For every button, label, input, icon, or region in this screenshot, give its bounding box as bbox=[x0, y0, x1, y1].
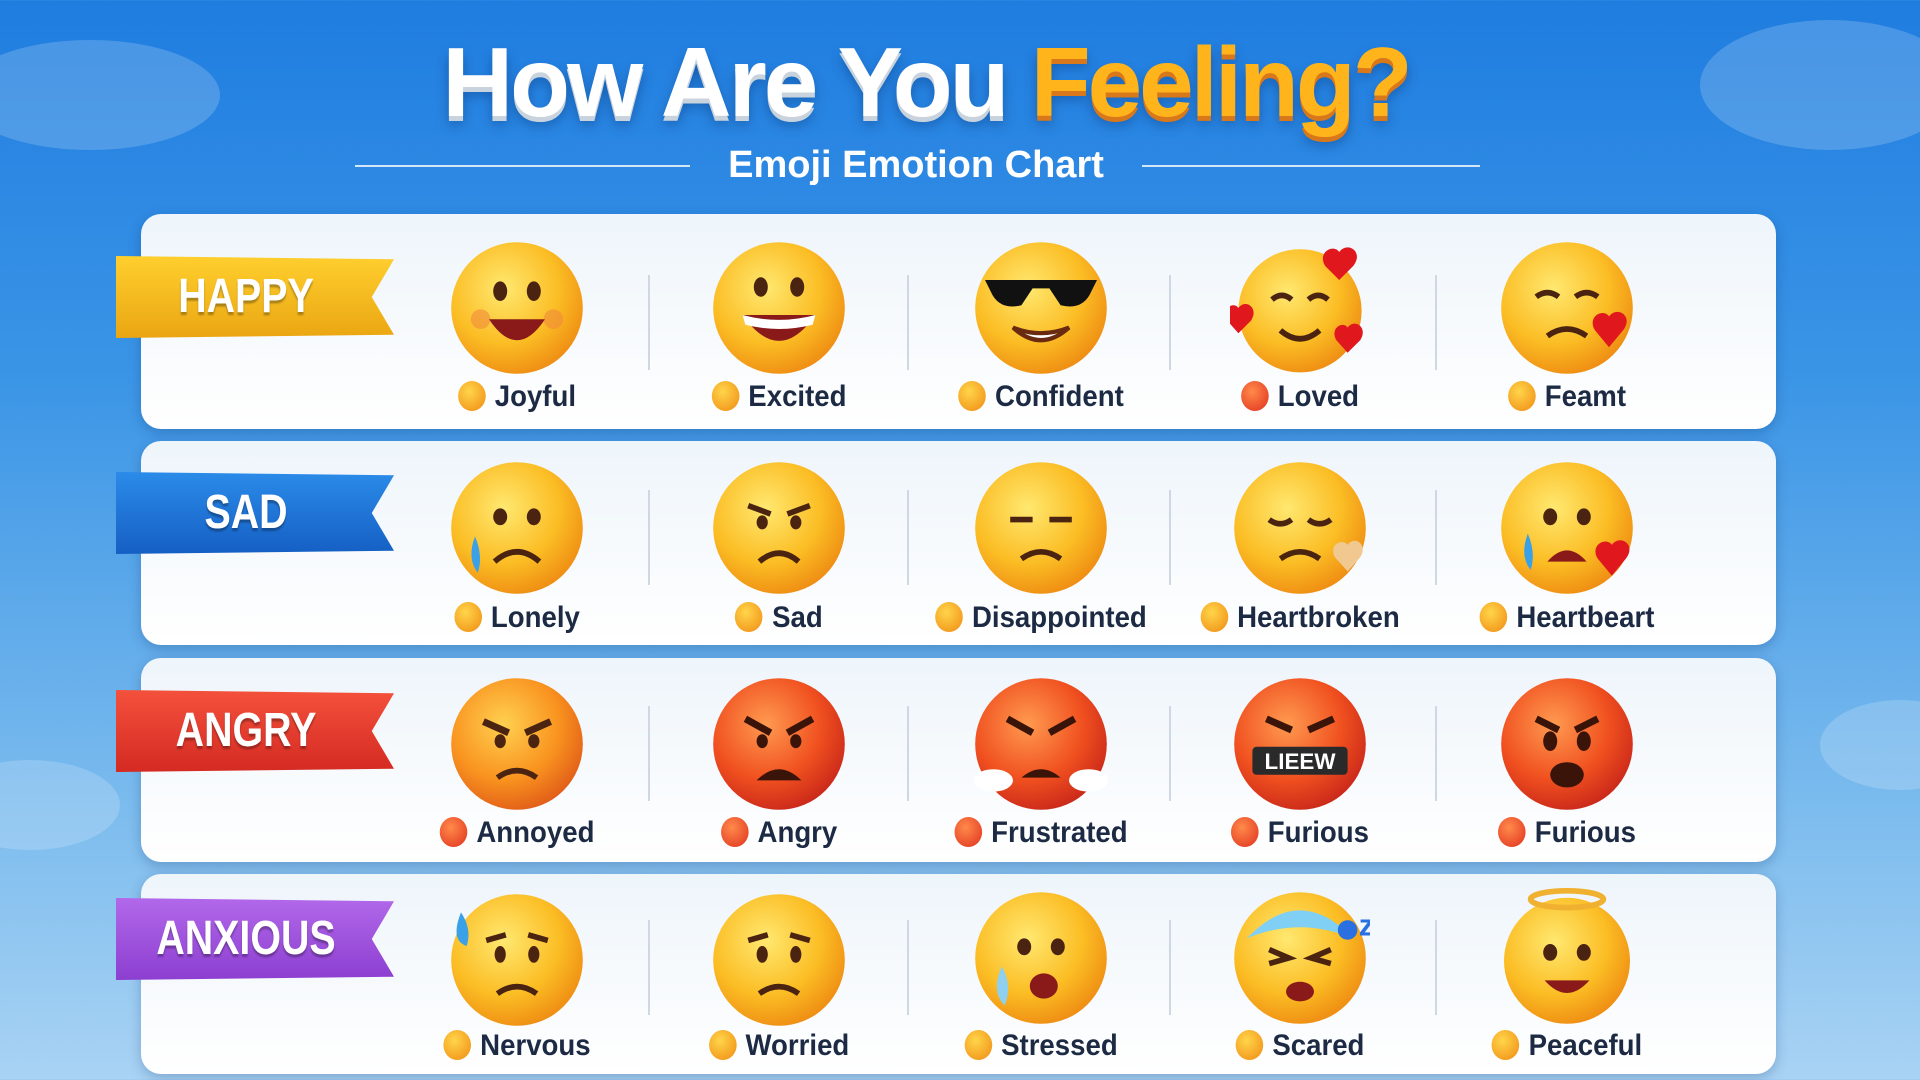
subtitle: Emoji Emotion Chart bbox=[728, 144, 1104, 186]
text: Angry bbox=[758, 816, 837, 849]
emoji: heartbeart bbox=[1501, 462, 1633, 594]
row 4 labels: Nervous bbox=[480, 1029, 591, 1062]
emoji: nervous bbox=[451, 894, 583, 1026]
row 2 labels: Lonely bbox=[491, 601, 580, 634]
emoji: lonely bbox=[451, 462, 583, 594]
text: Feamt bbox=[1545, 380, 1626, 413]
ribbon: SAD: SAD bbox=[204, 486, 288, 539]
ribbon: ANGRY: ANGRY bbox=[176, 704, 316, 757]
emoji: furious censored bbox=[1234, 678, 1366, 810]
emoji: scared bbox=[1234, 892, 1370, 1024]
emoji: stressed bbox=[975, 892, 1107, 1024]
emoji: disappointed bbox=[975, 462, 1107, 594]
row 3 labels: Annoyed bbox=[476, 816, 594, 849]
emoji: joyful bbox=[451, 242, 583, 374]
panel: sad bbox=[141, 441, 1776, 645]
emoji: loved bbox=[1230, 247, 1363, 372]
panel: happy bbox=[141, 214, 1776, 429]
text: Worried bbox=[746, 1029, 849, 1062]
text: Scared bbox=[1272, 1029, 1364, 1062]
emoji: excited bbox=[713, 242, 845, 374]
ribbon: HAPPY bbox=[116, 256, 394, 338]
text: Disappointed bbox=[972, 601, 1147, 634]
dividers bbox=[648, 242, 1632, 1026]
row 1 labels: Joyful bbox=[495, 380, 576, 413]
panel: angry bbox=[141, 658, 1776, 862]
ribbon: ANGRY bbox=[116, 690, 394, 772]
ribbon: SAD bbox=[116, 472, 394, 554]
emoji: furious bbox=[1501, 678, 1633, 810]
emoji: annoyed bbox=[451, 678, 583, 810]
emoji: peaceful bbox=[1504, 888, 1630, 1024]
text: Stressed bbox=[1001, 1029, 1118, 1062]
text: Peaceful bbox=[1529, 1029, 1642, 1062]
text: Sad bbox=[772, 601, 823, 634]
text: Furious bbox=[1268, 816, 1369, 849]
text: Confident bbox=[995, 380, 1124, 413]
emoji: heartbroken bbox=[1234, 462, 1366, 594]
text: Loved bbox=[1278, 380, 1359, 413]
ribbon: HAPPY: HAPPY bbox=[178, 270, 314, 323]
emoji: furious censored: LIEEW bbox=[1265, 749, 1336, 774]
emoji: angry bbox=[713, 678, 845, 810]
text: Frustrated bbox=[991, 816, 1128, 849]
text: Excited bbox=[748, 380, 846, 413]
emoji: sad bbox=[713, 462, 845, 594]
ribbon: ANXIOUS: ANXIOUS bbox=[156, 912, 336, 965]
panel: anxious bbox=[141, 874, 1776, 1074]
emoji: frustrated bbox=[975, 678, 1107, 810]
text: Heartbroken bbox=[1237, 601, 1400, 634]
text: Heartbeart bbox=[1516, 601, 1654, 634]
emoji: heart bbox=[1501, 242, 1633, 374]
text: Furious bbox=[1535, 816, 1636, 849]
title: How Are You Feeling? bbox=[442, 27, 1410, 137]
ribbon: ANXIOUS bbox=[116, 898, 394, 980]
emoji: confident bbox=[975, 242, 1107, 374]
row 1 labels bbox=[458, 380, 576, 413]
emoji: worried bbox=[713, 894, 845, 1026]
